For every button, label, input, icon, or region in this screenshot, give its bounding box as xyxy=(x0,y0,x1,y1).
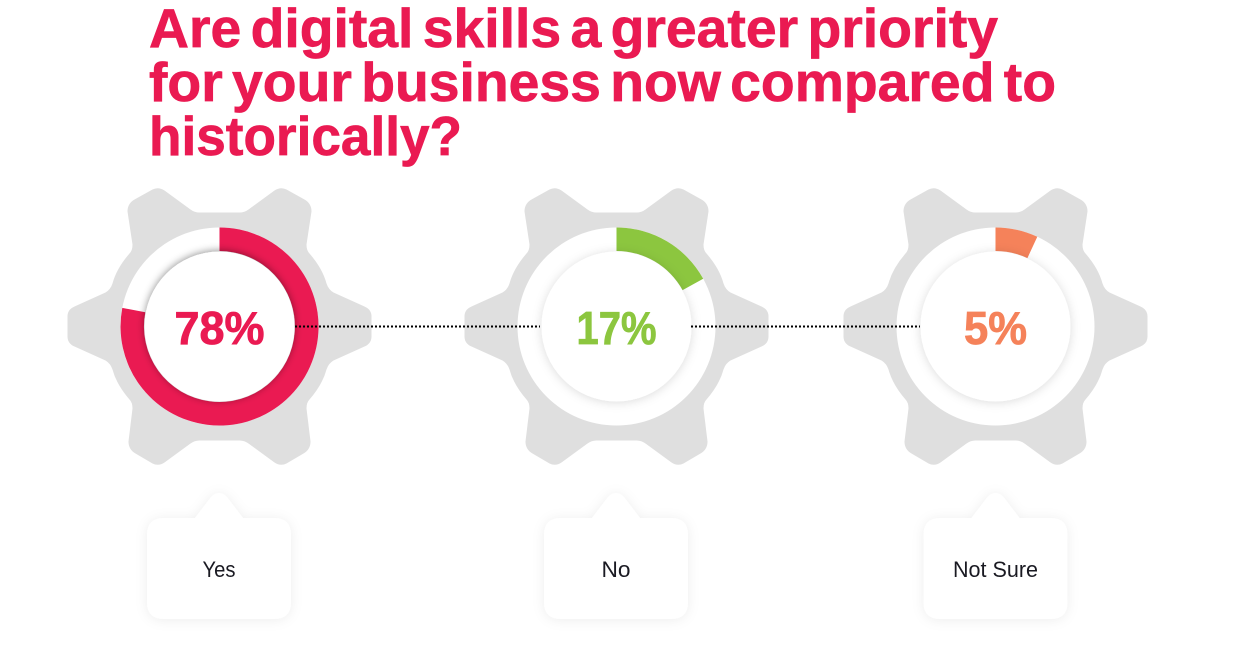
title: for your business now compared to xyxy=(149,51,1056,113)
callout: yes xyxy=(147,493,291,619)
gear: no 17%: 17% xyxy=(576,302,656,354)
gear: not sure 5% xyxy=(844,188,1148,465)
callout: not sure xyxy=(924,493,1068,619)
gear: yes 78%: 78% xyxy=(174,302,264,354)
callout: not sure: Not Sure xyxy=(953,557,1038,582)
callout: no xyxy=(544,493,688,619)
callout: yes: Yes xyxy=(202,557,236,582)
callout: no: No xyxy=(602,557,630,582)
gear: yes 78% xyxy=(68,188,372,465)
title xyxy=(149,0,1056,167)
gear: no 17% xyxy=(464,188,768,465)
title: historically? xyxy=(149,105,462,167)
gear: not sure 5%: 5% xyxy=(964,302,1027,354)
dotted connectors xyxy=(295,326,920,328)
